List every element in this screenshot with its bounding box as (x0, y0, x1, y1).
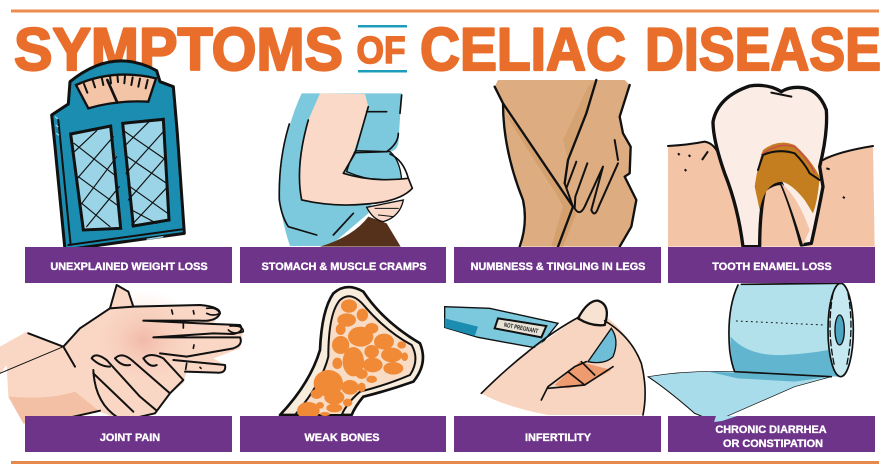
label bar: weak bones: WEAK BONES (304, 432, 380, 444)
label bar: numbness and tingling: NUMBNESS & TINGLING IN LEGS (471, 261, 645, 273)
label bar: chronic diarrhea or constipation (668, 416, 875, 452)
title: SYMPTOMS (14, 16, 343, 83)
label bar: joint pain: JOINT PAIN (100, 432, 160, 444)
roll tail overlap on label (714, 416, 737, 422)
label bar: tooth enamel loss (668, 247, 875, 283)
top rule (11, 10, 879, 12)
label bar: joint pain (25, 416, 232, 452)
icon: leg with hand (495, 80, 636, 247)
label bar: chronic diarrhea or constipation: OR CONSTIPATION (723, 438, 823, 450)
label bar: tooth enamel loss: TOOTH ENAMEL LOSS (712, 261, 832, 273)
icon: weak bone (280, 287, 423, 419)
title: CELIAC (420, 16, 626, 83)
icon: pregnancy test in hand (445, 301, 645, 415)
title (14, 16, 881, 83)
label bar: stomach and muscle cramps: STOMACH & MUSCLE CRAMPS (262, 261, 426, 273)
label bar: numbness and tingling (454, 247, 661, 283)
label bar: weak bones (240, 416, 446, 452)
icon: stomach cramps (279, 93, 412, 247)
label bar: chronic diarrhea or constipation: CHRONIC DIARRHEA (715, 424, 827, 436)
label bar: infertility: INFERTILITY (525, 432, 592, 444)
label bar: unexplained weight loss: UNEXPLAINED WEIGHT LOSS (50, 261, 208, 273)
label bar: stomach and muscle cramps (240, 247, 446, 283)
icon: tooth (668, 85, 875, 247)
bottom rule (11, 461, 879, 464)
icon: weighing scale (52, 61, 184, 250)
label bar: infertility (454, 416, 661, 452)
icon: pregnancy test in hand: NOT PREGNANT (503, 322, 539, 335)
label bar: unexplained weight loss (25, 247, 232, 283)
icon: joint pain hands (0, 285, 243, 425)
title word: of with teal rules: OF (356, 30, 406, 72)
icon: toilet paper roll (648, 283, 853, 422)
